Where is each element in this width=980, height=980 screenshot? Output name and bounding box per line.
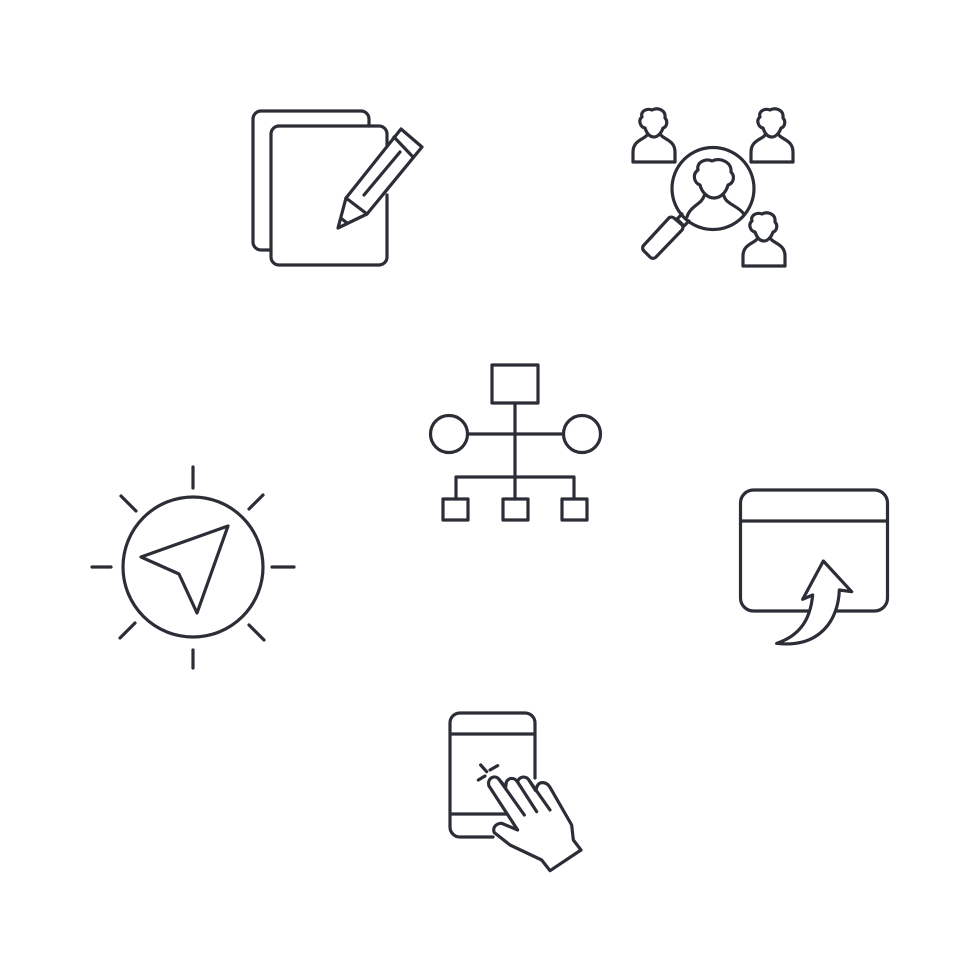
icon: hand tapping tablet <box>450 713 581 871</box>
person: top right <box>751 109 793 162</box>
magnifier lens <box>672 148 754 230</box>
icon: documents and pencil <box>253 111 422 265</box>
icon: compass navigation <box>92 467 294 668</box>
person: bottom right <box>743 213 785 266</box>
icon: magnifier searching people <box>633 109 793 266</box>
magnifier handle <box>643 214 689 258</box>
person inside lens <box>687 160 743 217</box>
person: top left <box>633 109 675 162</box>
icon: browser window with upload arrow <box>740 490 888 644</box>
icon: site map hierarchy <box>430 365 600 520</box>
